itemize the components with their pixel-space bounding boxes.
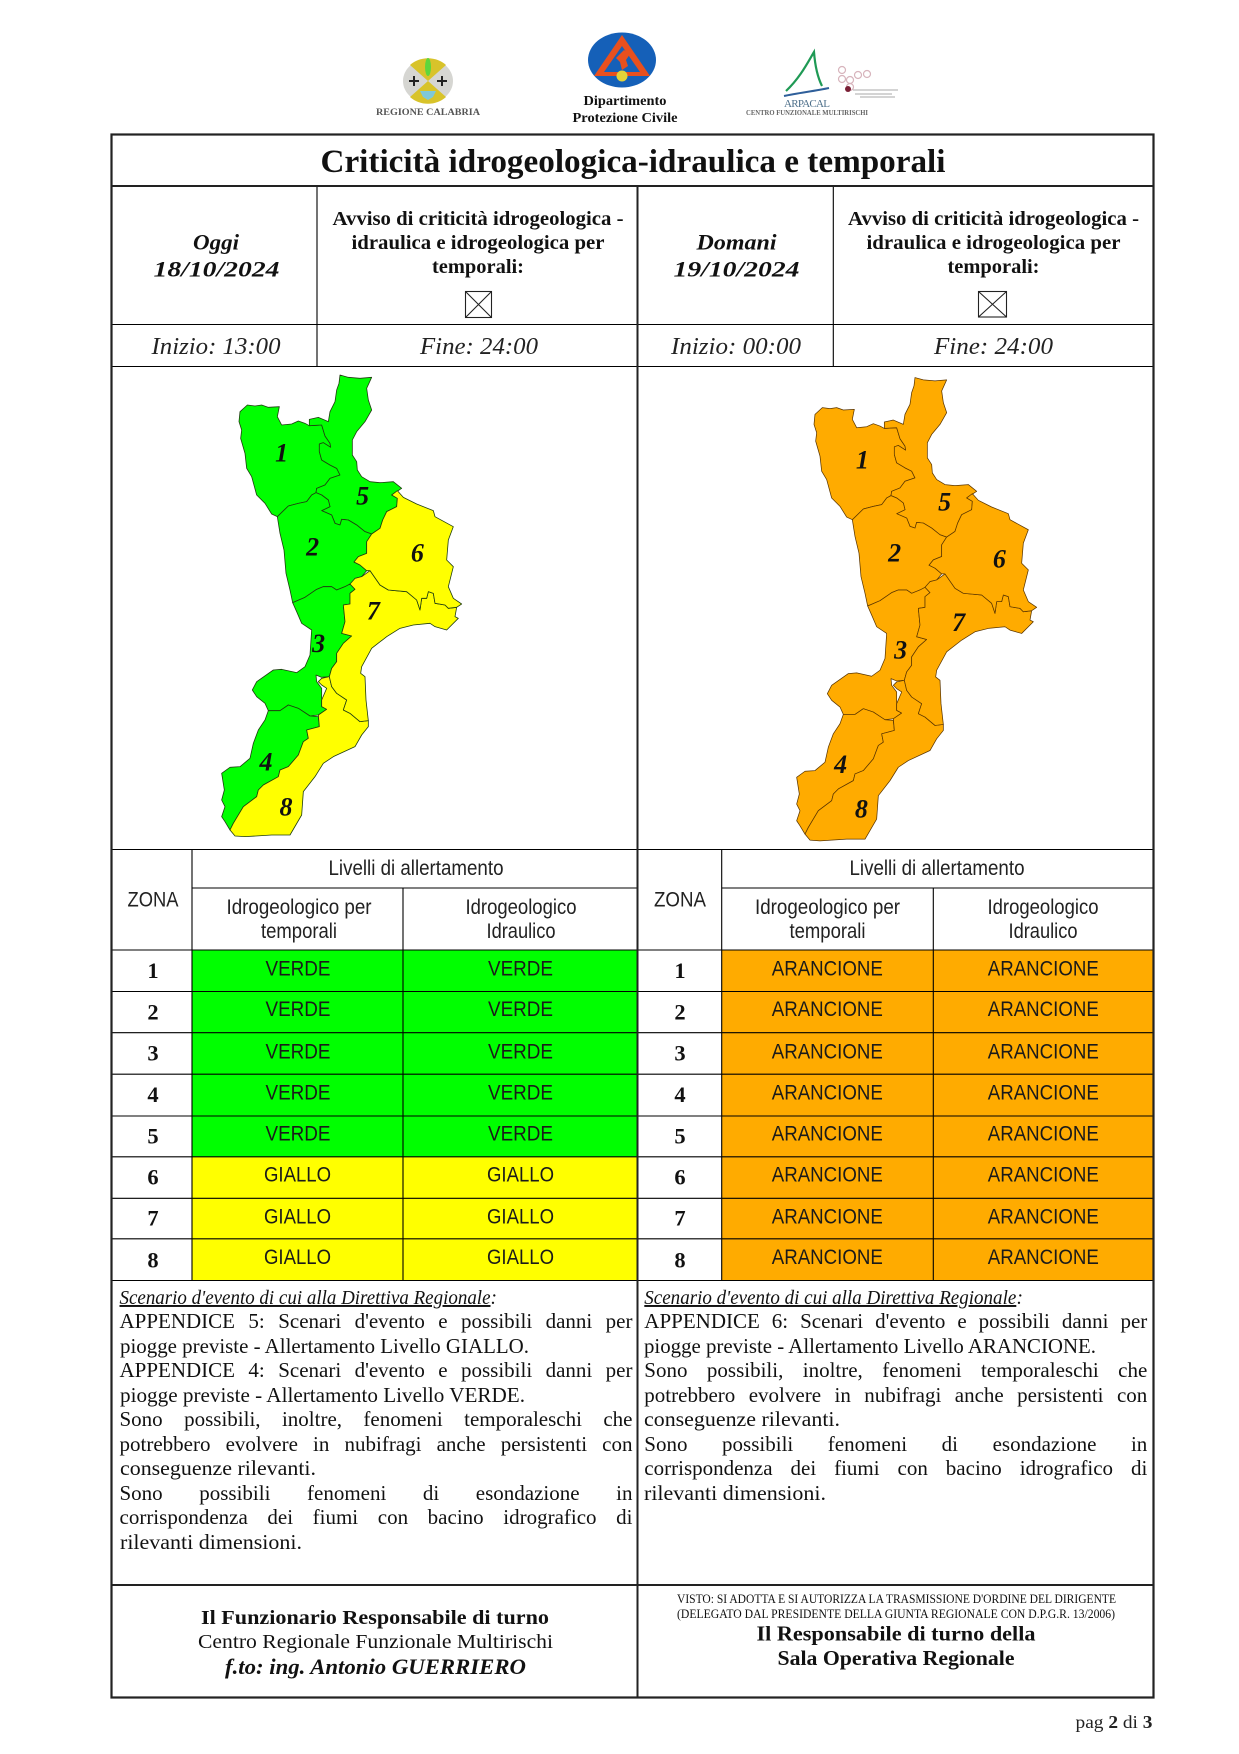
table header: today: Idrogeologico per <box>226 896 372 919</box>
header: tomorrow warning notice: idraulica e idrogeologica per <box>866 232 1120 254</box>
logo: ARPACAL: CENTRO FUNZIONALE MULTIRISCHI <box>746 108 868 117</box>
zone numbers column: today: 5 <box>147 1124 159 1148</box>
alert levels: tomorrow: ARANCIONE <box>772 1040 883 1064</box>
alert levels: today: GIALLO <box>264 1164 331 1186</box>
header: tomorrow warning notice: temporali: <box>948 256 1040 278</box>
alert levels: today: VERDE <box>266 1122 330 1146</box>
zone numbers column: today: 4 <box>147 1082 159 1107</box>
text: conseguenze rilevanti. <box>644 1407 840 1431</box>
zone numbers: 5 <box>356 482 369 511</box>
alert levels: today: GIALLO <box>264 1206 331 1228</box>
zone 5 <box>309 375 402 534</box>
zone numbers: 1 <box>275 438 288 467</box>
zone 6 <box>354 491 462 610</box>
signature block: right <box>677 1592 1116 1670</box>
zone 4 <box>797 709 894 834</box>
alert levels: tomorrow <box>772 958 1099 1269</box>
validity times <box>150 334 1053 360</box>
validity times: Fine: 24:00 <box>933 334 1053 360</box>
zone numbers column: today: 1 <box>147 958 159 983</box>
validity times: Inizio: 00:00 <box>670 334 801 360</box>
text: APPENDICE 6: Scenari d'evento e possibili danni per <box>644 1309 1147 1333</box>
header: tomorrow warning notice <box>848 208 1139 278</box>
logo: Regione Calabria: REGIONE CALABRIA <box>376 108 480 118</box>
header: today date: Oggi <box>193 230 240 254</box>
text block: today scenario <box>120 1309 632 1554</box>
zone numbers: 5 <box>938 488 951 517</box>
zone numbers column: tomorrow <box>674 958 686 1272</box>
text: APPENDICE 5: Scenari d'evento e possibili danni per <box>120 1309 632 1333</box>
header: tomorrow date: 19/10/2024 <box>674 256 800 282</box>
header: today date <box>154 230 280 282</box>
header: today warning notice: temporali: <box>432 256 524 278</box>
zone 1 <box>814 408 915 520</box>
table header: tomorrow <box>654 857 1098 943</box>
header: today warning notice: Avviso di criticità idrogeologica - <box>332 208 624 230</box>
table header: tomorrow: temporali <box>790 920 866 943</box>
text: corrispondenza dei fiumi con bacino idrografico di <box>120 1505 632 1529</box>
zone 8 <box>805 680 943 841</box>
alert levels: today <box>264 958 554 1269</box>
zone 8 <box>230 677 368 837</box>
alert levels: today: VERDE <box>488 1040 553 1064</box>
alert levels: tomorrow: ARANCIONE <box>772 998 883 1021</box>
table header: tomorrow: Idrogeologico per <box>755 896 900 919</box>
zone numbers: 8 <box>855 795 868 824</box>
zone numbers column: today: 8 <box>147 1248 159 1272</box>
zone numbers column: today: 7 <box>147 1206 159 1230</box>
zone 7 <box>329 571 458 722</box>
zone 1 <box>239 405 340 517</box>
text: Sono possibili fenomeni di esondazione in <box>644 1432 1147 1456</box>
zone numbers column: tomorrow: 7 <box>674 1206 686 1230</box>
zone numbers <box>258 438 424 821</box>
alert levels: today: VERDE <box>266 998 330 1021</box>
signature block: right: (DELEGATO DAL PRESIDENTE DELLA GIUNTA REGIONALE CON D.P.G.R. 13/2006) <box>677 1607 1115 1621</box>
zone numbers column: today <box>147 958 159 1272</box>
logo: ARPACAL <box>746 52 898 117</box>
zone numbers: 2 <box>887 538 901 568</box>
scenario heading: today: : <box>490 1288 497 1309</box>
table header: today: Idraulico <box>486 920 556 943</box>
text: potrebbero evolvere in nubifragi anche persistenti con <box>644 1382 1147 1406</box>
alert levels: tomorrow: ARANCIONE <box>988 1246 1099 1269</box>
header: today warning notice: idraulica e idrogeologica per <box>352 232 604 254</box>
table header: today: Idrogeologico <box>466 896 576 919</box>
text: Sono possibili, inoltre, fenomeni temporaleschi che <box>120 1407 632 1431</box>
header: today date: 18/10/2024 <box>154 256 280 282</box>
text: potrebbero evolvere in nubifragi anche persistenti con <box>120 1432 632 1456</box>
text: corrispondenza dei fiumi con bacino idrografico di <box>644 1456 1147 1480</box>
logo: Protezione Civile: Dipartimento <box>584 94 666 109</box>
alert levels: tomorrow: ARANCIONE <box>988 1082 1099 1104</box>
alert levels: tomorrow: ARANCIONE <box>988 1164 1099 1186</box>
zone numbers <box>833 445 1007 824</box>
zone numbers column: tomorrow: 2 <box>674 1000 686 1024</box>
signature block: left <box>198 1607 553 1679</box>
zone numbers column: today: 3 <box>147 1040 159 1066</box>
alert levels: today: VERDE <box>488 998 553 1021</box>
zone numbers: 6 <box>411 538 424 567</box>
table header: today: ZONA <box>128 888 178 912</box>
icon: tomorrow checkbox crossed <box>978 292 1006 317</box>
table frame lines <box>112 134 1154 1698</box>
text: conseguenze rilevanti. <box>120 1456 316 1480</box>
alert levels: tomorrow: ARANCIONE <box>988 1040 1099 1064</box>
table header: today: temporali <box>261 920 337 943</box>
alert levels: today: GIALLO <box>264 1246 331 1269</box>
zone numbers: 8 <box>279 792 292 821</box>
logo: ARPACAL: ARPACAL <box>784 98 830 110</box>
zone numbers: 7 <box>952 608 966 637</box>
zone numbers column: tomorrow: 3 <box>674 1040 686 1066</box>
header: tomorrow warning notice: Avviso di criticità idrogeologica - <box>848 208 1139 230</box>
alert levels: today: GIALLO <box>487 1206 554 1228</box>
alert levels: tomorrow: ARANCIONE <box>772 1206 883 1228</box>
table header: today: Livelli di allertamento <box>328 857 504 880</box>
zone numbers column: today: 6 <box>147 1164 159 1190</box>
signature block: left: Centro Regionale Funzionale Multirischi <box>198 1631 553 1653</box>
logo: Protezione Civile: Protezione Civile <box>572 111 678 126</box>
zone 2 <box>277 493 372 603</box>
zone numbers column: tomorrow: 5 <box>674 1124 686 1148</box>
alert levels: tomorrow: ARANCIONE <box>772 1082 883 1104</box>
table header: tomorrow: Idraulico <box>1008 920 1078 943</box>
zone 4 <box>222 705 319 830</box>
scenario heading: tomorrow: Scenario d'evento di cui alla Direttiva Regionale <box>644 1288 1017 1309</box>
alert levels: today: VERDE <box>266 1082 330 1104</box>
signature block: right: Sala Operativa Regionale <box>778 1646 1014 1670</box>
header: tomorrow date <box>674 230 800 282</box>
table header: tomorrow: Livelli di allertamento <box>850 857 1024 880</box>
alert levels: tomorrow: ARANCIONE <box>772 958 883 980</box>
zone 7 <box>904 574 1033 725</box>
alert levels: today: VERDE <box>488 1122 553 1146</box>
zone numbers: 1 <box>856 445 869 475</box>
validity times: Inizio: 13:00 <box>150 334 280 360</box>
map: today <box>222 375 462 837</box>
alert levels: tomorrow: ARANCIONE <box>988 998 1099 1021</box>
zone numbers column: tomorrow: 1 <box>674 958 686 983</box>
zone 5 <box>884 378 977 537</box>
alert levels: today: GIALLO <box>487 1246 554 1269</box>
zone numbers: 3 <box>311 629 325 658</box>
zone numbers: 2 <box>305 532 319 561</box>
alert levels: today: VERDE <box>488 1082 553 1104</box>
zone 2 <box>852 496 947 606</box>
alert levels: tomorrow: ARANCIONE <box>772 1246 883 1269</box>
table header: tomorrow: ZONA <box>654 888 706 912</box>
alert levels: today: VERDE <box>266 1040 330 1064</box>
text: Sono possibili, inoltre, fenomeni temporaleschi che <box>644 1358 1147 1382</box>
signature block: left: Il Funzionario Responsabile di turno <box>201 1607 549 1629</box>
zone numbers column: today: 2 <box>147 1000 159 1024</box>
logo: Regione Calabria <box>376 58 480 118</box>
header: tomorrow date: Domani <box>695 230 777 254</box>
text: Sono possibili fenomeni di esondazione in <box>120 1480 632 1504</box>
zone numbers: 7 <box>367 596 381 625</box>
signature block: right: VISTO: SI ADOTTA E SI AUTORIZZA LA TRASMISSIONE D'ORDINE DEL DIRIGENTE <box>677 1592 1116 1606</box>
zone numbers column: tomorrow: 4 <box>674 1082 686 1107</box>
text block: tomorrow scenario <box>644 1309 1148 1504</box>
validity times: Fine: 24:00 <box>419 334 538 360</box>
alert levels: tomorrow: ARANCIONE <box>772 1164 883 1186</box>
zone numbers: 4 <box>258 747 272 776</box>
alert table cell fills <box>192 950 1153 1280</box>
icon: today checkbox crossed <box>466 292 492 318</box>
zone 6 <box>929 494 1037 613</box>
signature block: right: Il Responsabile di turno della <box>756 1622 1036 1646</box>
text: piogge previste - Allertamento Livello ARANCIONE. <box>644 1334 1096 1358</box>
alert levels: tomorrow: ARANCIONE <box>772 1122 883 1146</box>
page number: pag 2 di 3 <box>1076 1712 1152 1732</box>
zone numbers column: tomorrow: 6 <box>674 1164 686 1190</box>
table header: today <box>128 857 576 943</box>
zone 3 <box>827 587 930 720</box>
header: today warning notice <box>332 208 624 278</box>
text: rilevanti dimensioni. <box>120 1530 301 1554</box>
text: APPENDICE 4: Scenari d'evento e possibili danni per <box>120 1358 632 1382</box>
alert levels: today: VERDE <box>488 958 553 980</box>
scenario heading: today: Scenario d'evento di cui alla Direttiva Regionale <box>120 1288 491 1309</box>
alert levels: tomorrow: ARANCIONE <box>988 1122 1099 1146</box>
signature block: left: f.to: ing. Antonio GUERRIERO <box>225 1654 526 1679</box>
zone numbers: 6 <box>993 545 1007 574</box>
alert levels: tomorrow: ARANCIONE <box>988 1206 1099 1228</box>
zone numbers column: tomorrow: 8 <box>674 1248 686 1272</box>
zone 3 <box>252 584 355 716</box>
text: piogge previste - Allertamento Livello GIALLO. <box>120 1334 528 1358</box>
table header: tomorrow: Idrogeologico <box>988 896 1098 919</box>
zone numbers: 4 <box>833 750 847 779</box>
text: rilevanti dimensioni. <box>644 1480 826 1504</box>
scenario heading: tomorrow: : <box>1016 1288 1023 1309</box>
alert levels: tomorrow: ARANCIONE <box>988 958 1099 980</box>
alert levels: today: VERDE <box>266 958 330 980</box>
text: piogge previste - Allertamento Livello VERDE. <box>120 1382 525 1406</box>
logo: Protezione Civile <box>572 32 678 126</box>
title: Criticità idrogeologica-idraulica e temporali <box>320 144 945 180</box>
map: tomorrow <box>797 378 1037 841</box>
alert levels: today: GIALLO <box>487 1164 554 1186</box>
zone numbers: 3 <box>893 635 907 665</box>
